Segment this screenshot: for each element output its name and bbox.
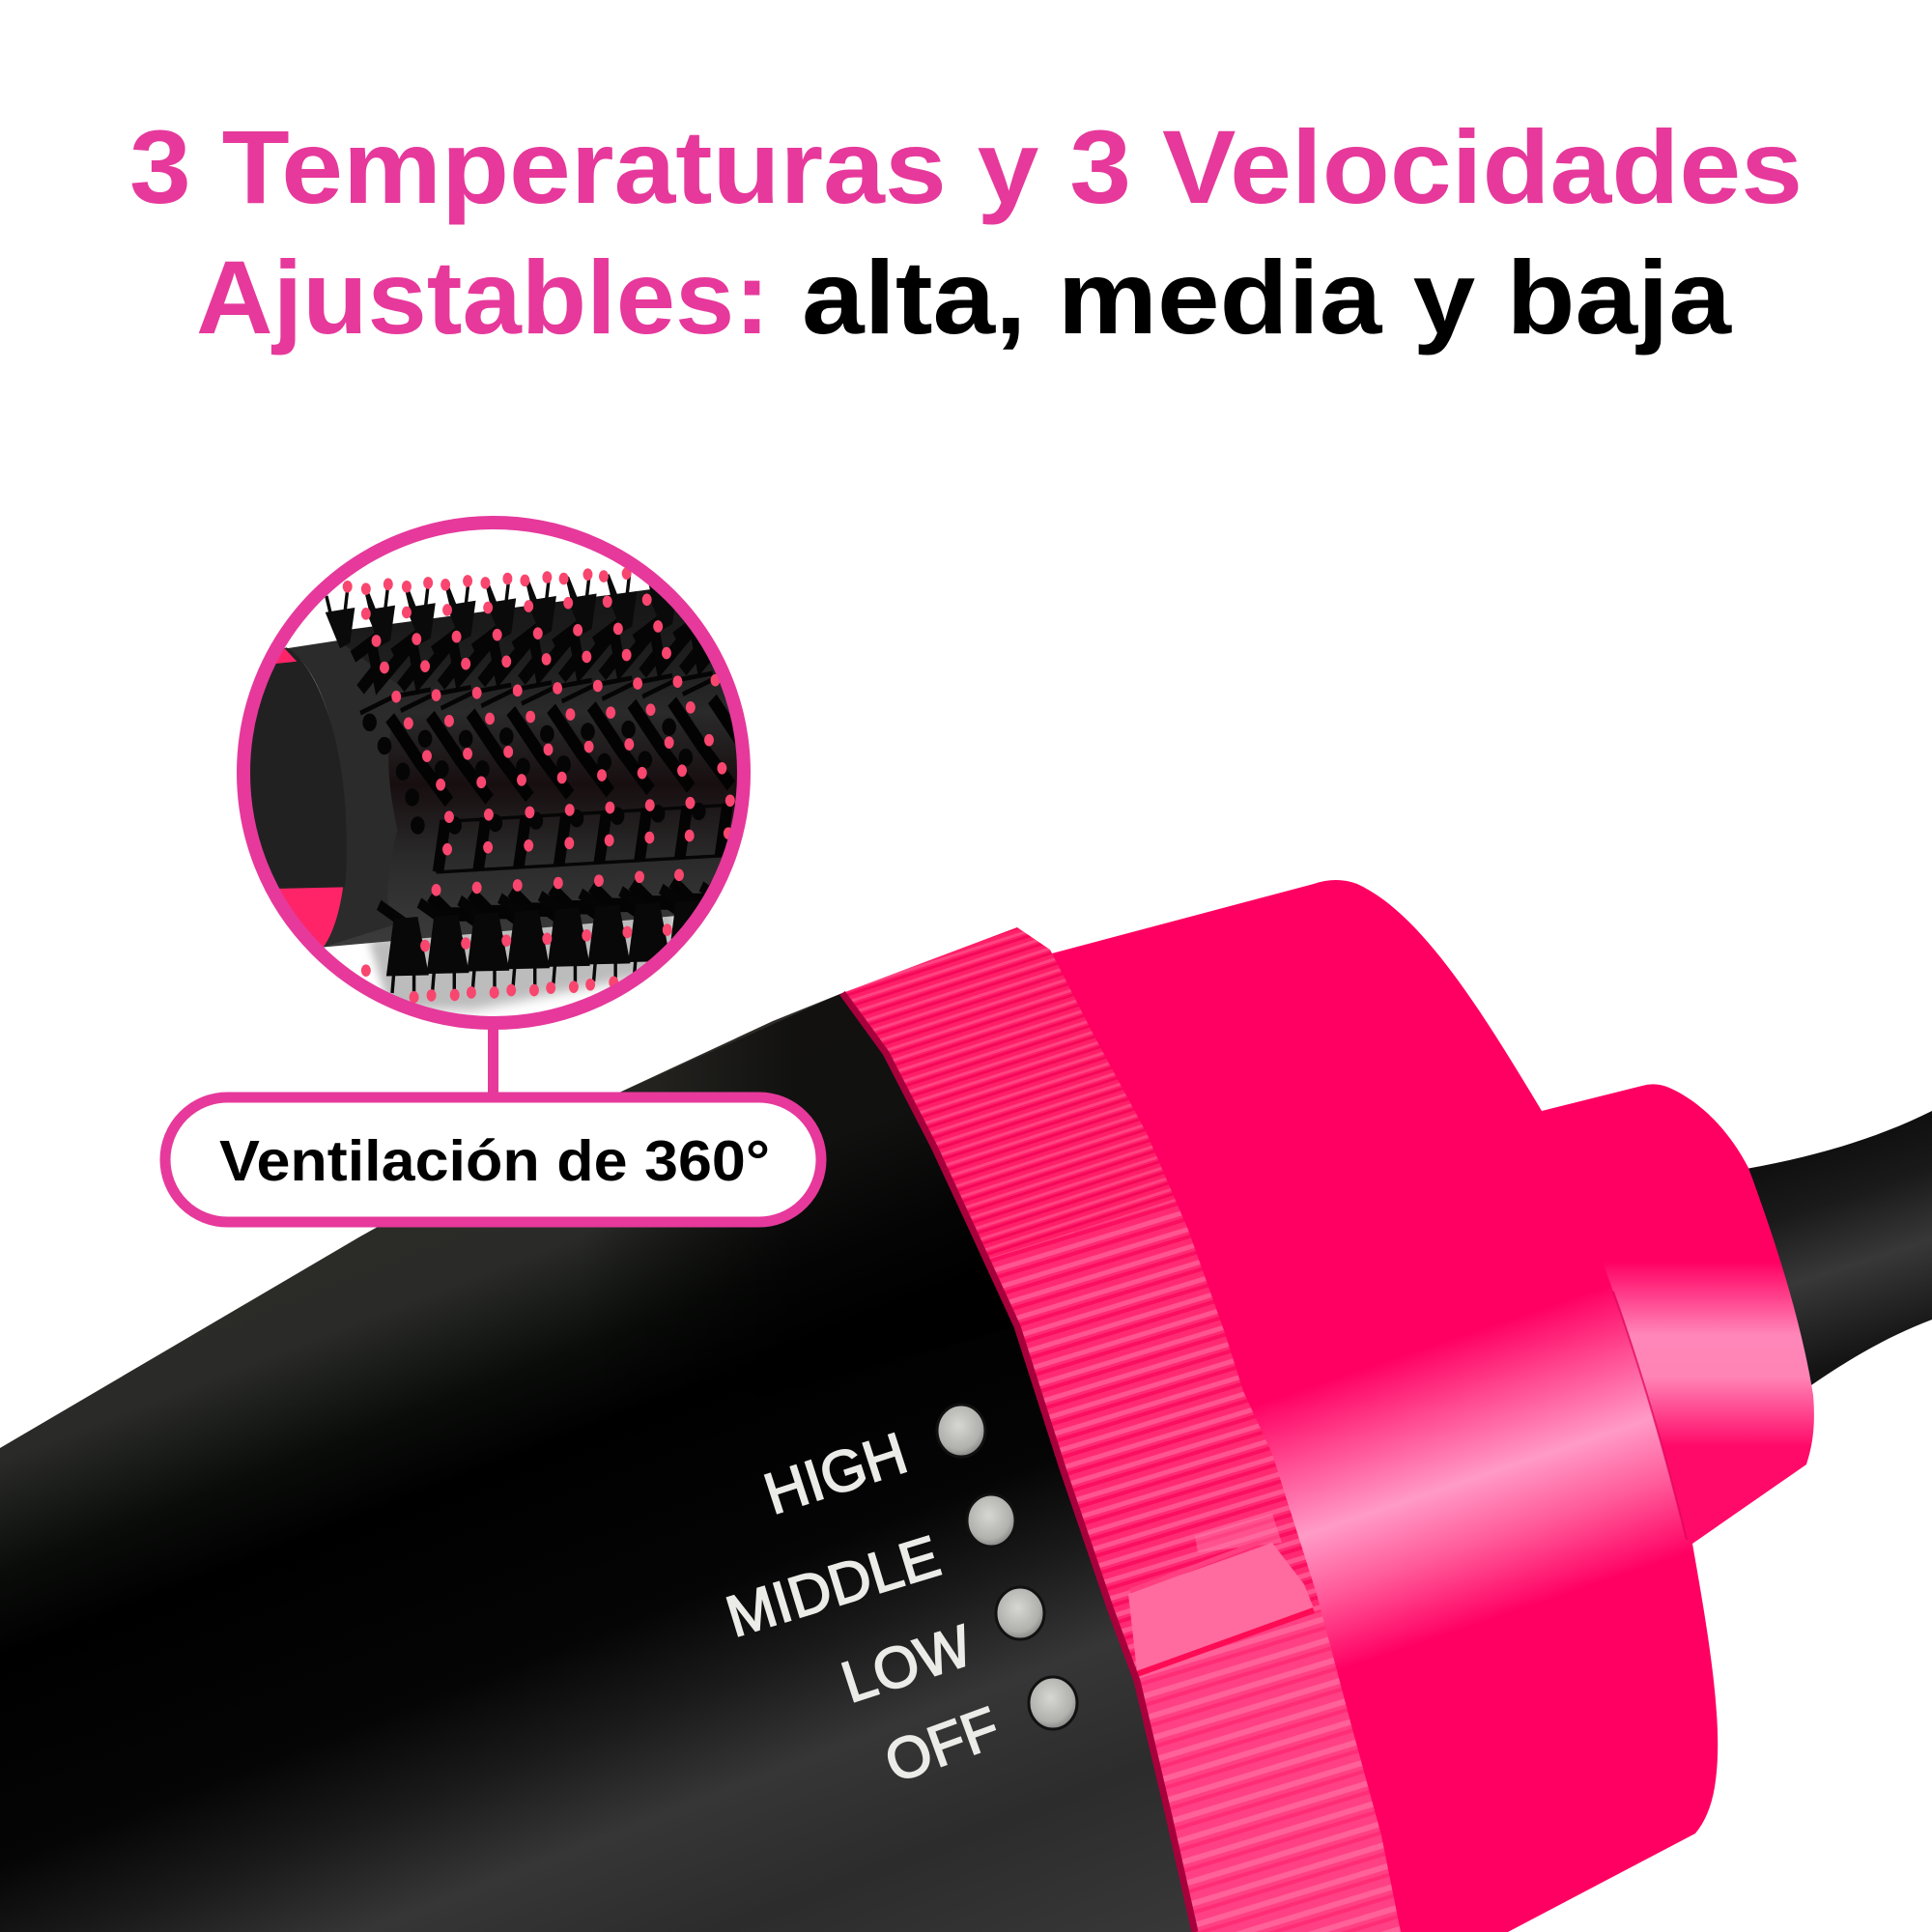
cable [1734,1111,1932,1385]
pink bristle tips [348,574,730,997]
ribbed ring [842,927,1401,1932]
cap shoulder [287,640,405,947]
black handle body [0,993,1203,1932]
title: alta, media y baja [802,239,1732,355]
ring left edge [842,993,1195,1932]
brush barrel [324,589,737,947]
pink sliver [273,648,297,664]
ring notch [1128,1543,1314,1671]
title: 3 Temperaturas y 3 Velocidades [129,108,1803,225]
switch labels: LOW [834,1612,980,1715]
switch labels [719,1420,1008,1795]
bristle columns [325,592,480,993]
switch labels: HIGH [756,1420,915,1526]
switch labels: OFF [877,1694,1008,1795]
product: hair dryer brush [0,880,1932,1932]
head and neck seam [1613,1292,1687,1540]
pink head [1005,880,1718,1932]
dark cap [245,647,347,889]
callout: Ventilacion de 360: Ventilación de 360° [219,1129,770,1193]
pink base [279,887,344,947]
pink neck [1542,1084,1814,1544]
switch labels: MIDDLE [719,1523,948,1649]
callout connector [488,1028,498,1097]
title: Ajustables: [196,239,770,355]
title [129,108,1803,355]
inset circle: brush detail [243,523,819,1023]
bristle bases [370,723,698,825]
body top shade near ring [580,993,1017,1449]
soft shadow below brush [368,905,674,1010]
switch indicator dots [937,1405,1077,1729]
callout: Ventilacion de 360 [165,1097,821,1222]
